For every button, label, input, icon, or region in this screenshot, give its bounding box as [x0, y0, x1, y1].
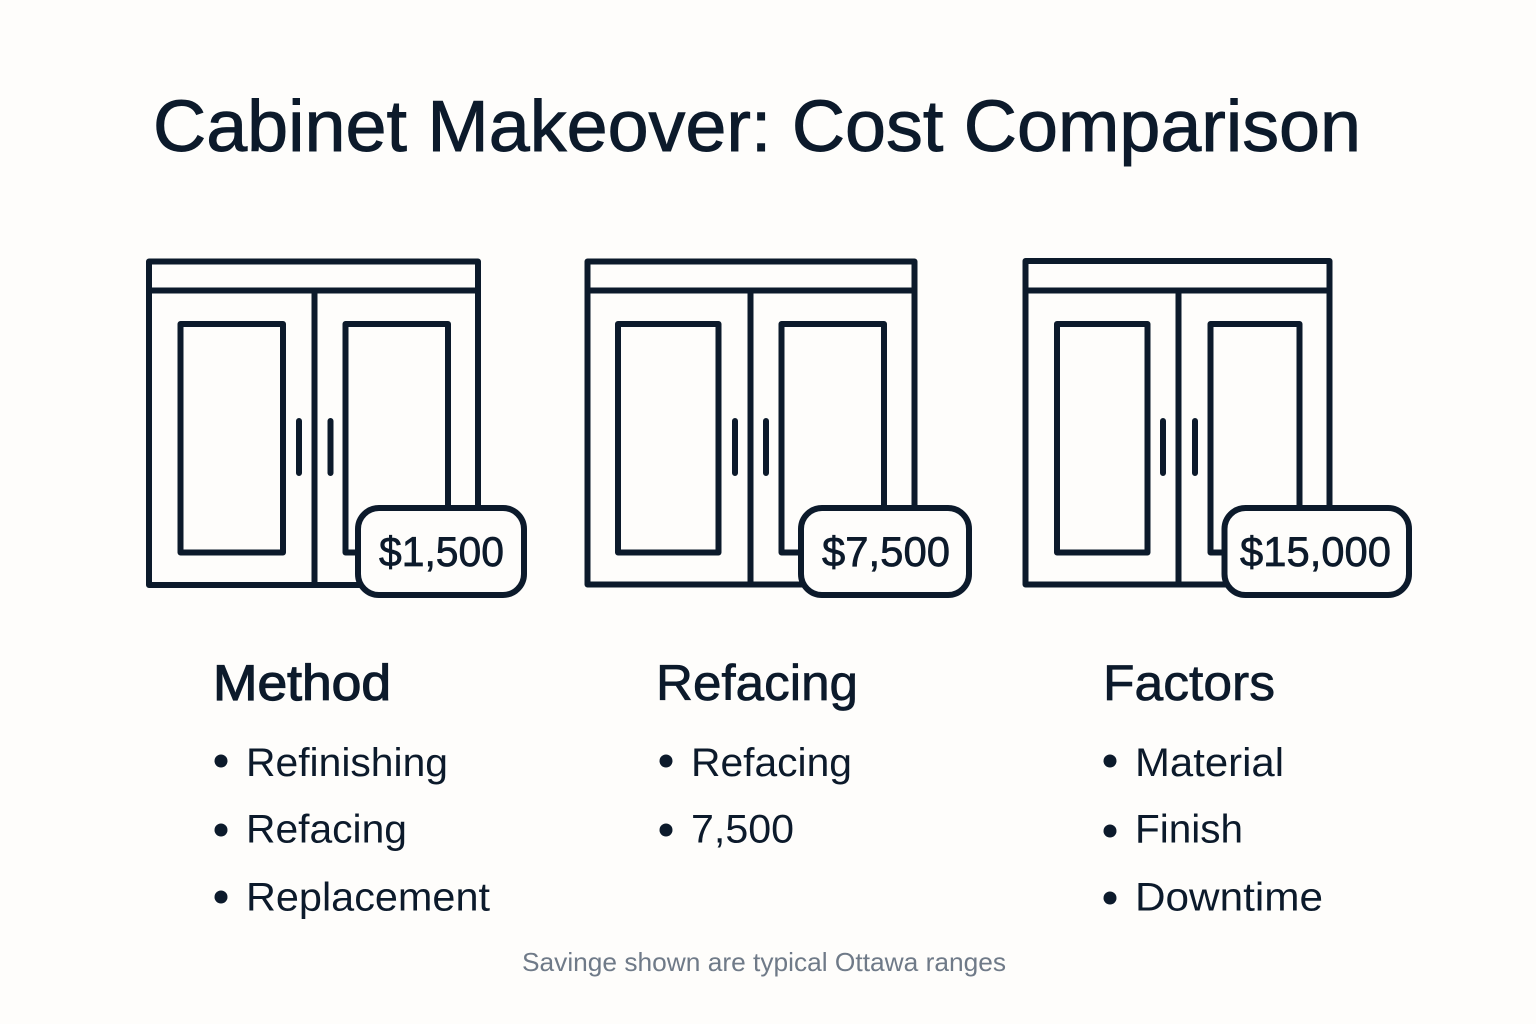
heading: Refacing: Refacing	[656, 655, 858, 711]
price badge 1: $1,500	[379, 528, 504, 575]
price badge 3: $15,000	[1240, 528, 1391, 575]
bullet list: factors	[1104, 741, 1323, 920]
bullet list: methods: Refinishing	[246, 741, 448, 785]
heading: Factors: Factors	[1103, 655, 1275, 711]
bullet list: factors: Material	[1135, 741, 1284, 785]
panel: cabinet 1	[149, 262, 524, 595]
bullet list: refacing: 7,500	[691, 808, 794, 852]
icon: cabinet 2 outline	[588, 262, 914, 584]
bullet list: factors: Downtime	[1135, 876, 1323, 920]
footnote: Savinge shown are typical Ottawa ranges	[522, 947, 1006, 977]
column: Factors	[1103, 655, 1323, 920]
price badge 2	[801, 508, 969, 595]
bullet list: methods	[214, 741, 490, 920]
panel: cabinet 2	[588, 262, 969, 595]
icon: cabinet 1 outline	[149, 262, 478, 585]
panel: cabinet 3	[1026, 261, 1409, 595]
price badge 1	[358, 508, 524, 595]
icon: cabinet 3 outline	[1026, 261, 1330, 584]
heading: Method: Method	[213, 655, 391, 711]
bullet list: refacing	[660, 741, 852, 852]
bullet list: factors: Finish	[1135, 808, 1243, 852]
price badge 2: $7,500	[822, 528, 950, 575]
bullet list: methods: Replacement	[246, 876, 490, 920]
column: Refacing	[656, 655, 858, 852]
title: Cabinet Makeover: Cost Comparison	[153, 87, 1361, 167]
bullet list: refacing: Refacing	[691, 741, 852, 785]
bullet list: methods: Refacing	[246, 808, 407, 852]
price badge 3	[1224, 508, 1409, 595]
column: Method	[213, 655, 490, 920]
